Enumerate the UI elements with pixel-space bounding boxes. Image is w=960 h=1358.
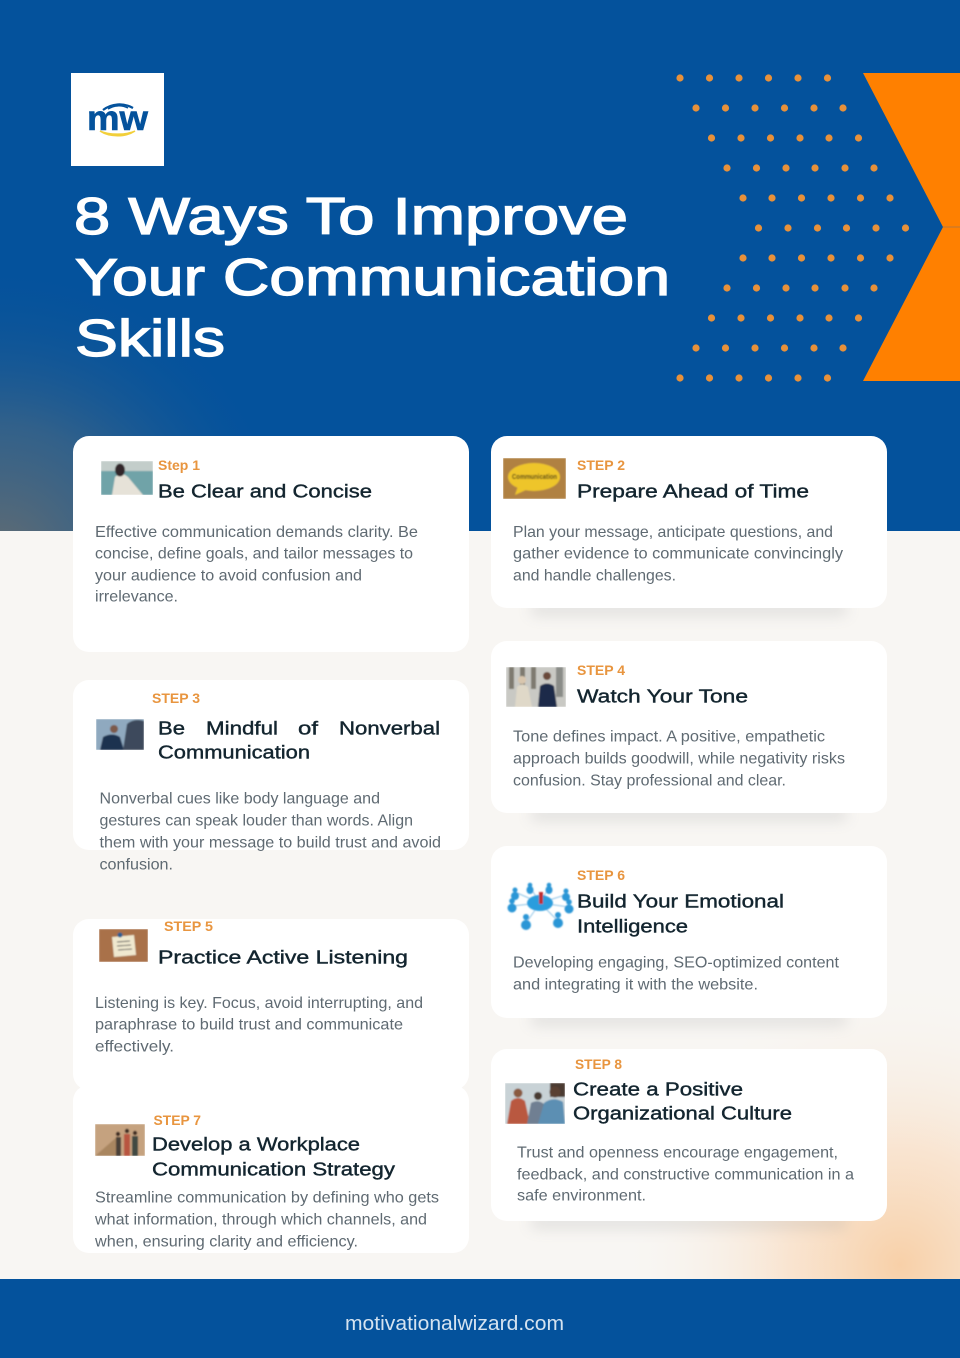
- panel: step 8: Organizational Culture: [573, 1102, 792, 1124]
- image: woman on teal sofa: [101, 461, 153, 495]
- panel: step 7: when, ensuring clarity and efficiency.: [94, 1233, 358, 1250]
- image: people network: [508, 883, 574, 930]
- logo: [71, 73, 164, 166]
- heading: be mindful of nonverbal communication: Be: [158, 718, 185, 738]
- panel: step 3: confusion.: [100, 856, 173, 873]
- footer: motivationalwizard.com: [345, 1313, 564, 1335]
- heading: be mindful of nonverbal communication: Mindful: [206, 718, 278, 738]
- panel: step 6: Intelligence: [577, 916, 688, 936]
- panel: step 2: Plan your message, anticipate questions, and: [513, 524, 833, 541]
- panel: step 2: Prepare Ahead of Time: [577, 480, 809, 502]
- orange chevron: [863, 73, 960, 381]
- panel: step 4: approach builds goodwill, while negativity risks: [513, 750, 845, 767]
- panel: step 7: what information, through which channels, and: [94, 1211, 427, 1228]
- panel: step 1: Step 1: [158, 457, 200, 473]
- panel: step 5: [73, 918, 469, 1090]
- panel: step 4: confusion. Stay professional and clear.: [513, 772, 786, 789]
- panel: step 1: [73, 436, 469, 652]
- panel: step 5: STEP 5: [164, 918, 213, 934]
- panel: step 1: your audience to avoid confusion and: [95, 567, 362, 584]
- panel: step 4: STEP 4: [577, 662, 625, 678]
- panel: step 2: [491, 436, 887, 608]
- panel: step 4: [491, 641, 887, 813]
- panel: step 6: STEP 6: [577, 867, 625, 883]
- panel: step 8: Create a Positive: [573, 1078, 743, 1100]
- footer: [0, 1279, 960, 1358]
- title: Your Communication: [75, 249, 670, 307]
- panel: step 6: [491, 846, 887, 1018]
- panel: step 5: effectively.: [95, 1038, 174, 1055]
- image: three people on a staircase: [95, 1124, 145, 1156]
- panel: step 1: irrelevance.: [95, 588, 178, 605]
- card shadows: [530, 602, 848, 1229]
- heading: be mindful of nonverbal communication: Communication: [158, 742, 310, 762]
- panel: step 8: STEP 8: [575, 1056, 622, 1072]
- image: yellow speech bubble: Communication: [512, 474, 557, 481]
- panel: step 3: gestures can speak louder than words. Align: [100, 812, 413, 829]
- panel: step 1: Be Clear and Concise: [158, 480, 372, 502]
- image: yellow speech bubble: [503, 458, 566, 499]
- panel: step 8: [491, 1049, 887, 1221]
- panel: step 1: Effective communication demands clarity. Be: [95, 524, 418, 541]
- panel: step 7: STEP 7: [154, 1112, 201, 1128]
- title: Skills: [75, 310, 225, 368]
- panel: step 4: Watch Your Tone: [577, 686, 748, 706]
- panel: step 2: gather evidence to communicate convincingly: [513, 545, 843, 562]
- panel: step 7: [73, 1085, 469, 1253]
- panel: step 7: Communication Strategy: [152, 1158, 396, 1180]
- panel: step 8: safe environment.: [517, 1187, 646, 1204]
- panel: step 4: Tone defines impact. A positive, empathetic: [513, 728, 825, 745]
- image: two colleagues talking: [506, 667, 566, 707]
- panel: step 6: and integrating it with the website.: [513, 976, 758, 993]
- panel: step 2: and handle challenges.: [513, 567, 676, 584]
- image: coworkers in an office: [505, 1083, 565, 1124]
- panel: step 7: Develop a Workplace: [152, 1134, 360, 1154]
- panel: step 3: them with your message to build trust and avoid: [100, 834, 441, 851]
- panel: step 8: feedback, and constructive communication in a: [517, 1166, 854, 1183]
- panel: step 3: STEP 3: [152, 690, 200, 706]
- title: 8 Ways To Improve: [74, 188, 628, 246]
- logo: mw: [87, 99, 149, 138]
- blue header band: [0, 0, 960, 531]
- heading: be mindful of nonverbal communication: of: [298, 718, 319, 738]
- panel: step 1: concise, define goals, and tailor messages to: [95, 545, 413, 562]
- panel: step 5: paraphrase to build trust and communicate: [95, 1016, 403, 1033]
- panel: step 8: Trust and openness encourage engagement,: [517, 1144, 838, 1161]
- image: businessmen talking: [96, 719, 144, 750]
- panel: step 6: Build Your Emotional: [577, 890, 784, 912]
- panel: step 5: Practice Active Listening: [158, 946, 408, 968]
- panel: step 3: Nonverbal cues like body language and: [100, 790, 380, 807]
- dot pattern: [676, 74, 909, 382]
- panel: step 3: [73, 680, 469, 873]
- title: [74, 188, 670, 368]
- heading: be mindful of nonverbal communication: Nonverbal: [339, 718, 440, 738]
- panel: step 5: Listening is key. Focus, avoid interrupting, and: [95, 995, 423, 1012]
- panel: step 6: Developing engaging, SEO-optimized content: [513, 954, 840, 971]
- image: pinned note on corkboard: [99, 929, 148, 962]
- heading: be mindful of nonverbal communication: [158, 718, 440, 762]
- panel: step 7: Streamline communication by defining who gets: [95, 1189, 439, 1206]
- bottom right orange glow: [600, 960, 960, 1280]
- panel: step 2: STEP 2: [577, 457, 625, 473]
